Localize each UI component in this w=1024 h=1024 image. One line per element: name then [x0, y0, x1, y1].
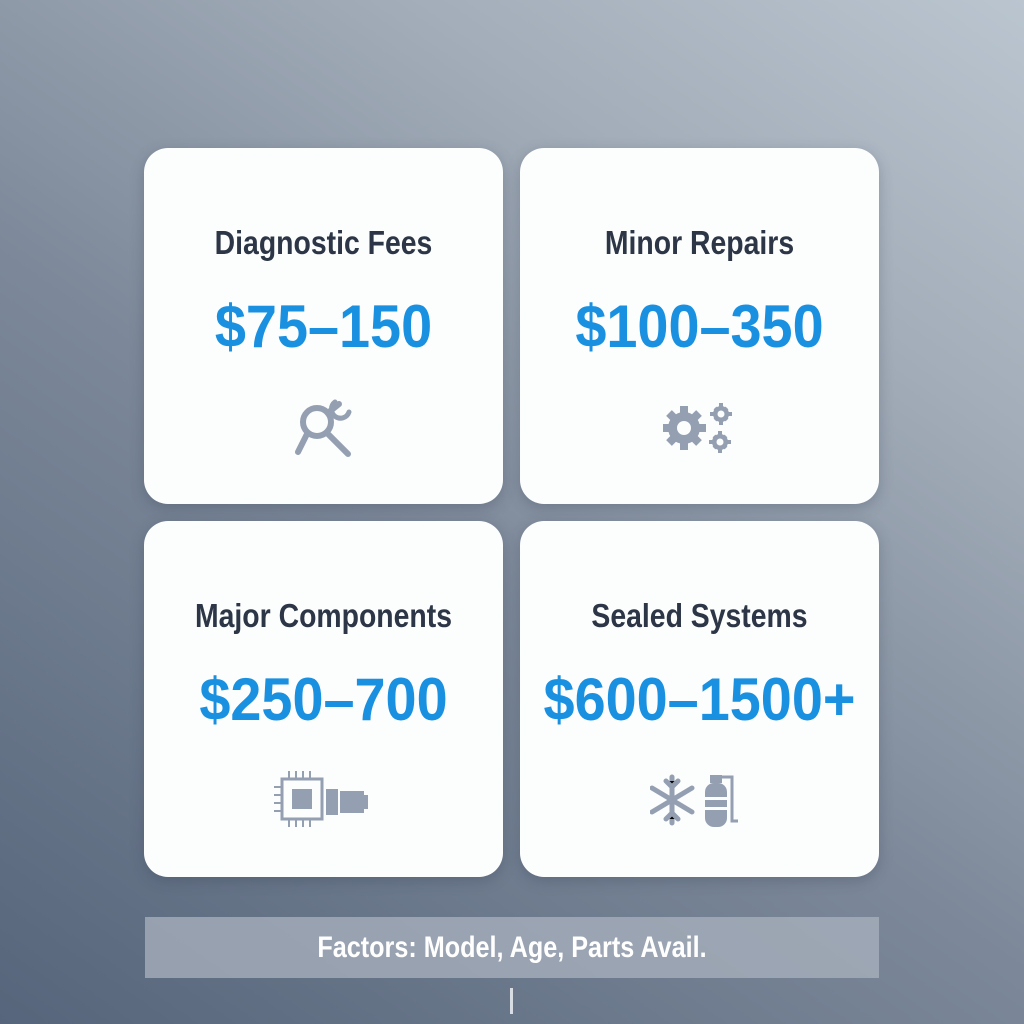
footer bar: factors: [145, 917, 879, 978]
icon: magnifier and wrench: [295, 400, 352, 457]
footer bar: factors: Factors: Model, Age, Parts Avail.: [317, 931, 707, 964]
price: $600–1500+: [544, 666, 855, 733]
heading: Minor Repairs: [605, 224, 794, 261]
icon: gears: [663, 403, 732, 453]
heading: Sealed Systems: [591, 597, 808, 634]
price: $75–150: [215, 293, 432, 360]
icon: chip and motor: [274, 771, 368, 827]
card: major components: [144, 521, 503, 877]
heading: Diagnostic Fees: [215, 224, 432, 261]
card: minor repairs: [520, 148, 879, 504]
price: $100–350: [575, 293, 824, 360]
card: diagnostic fees: [144, 148, 503, 504]
price: $250–700: [199, 666, 448, 733]
card: sealed systems: [520, 521, 879, 877]
icon: snowflake and tank: [650, 774, 738, 827]
heading: Major Components: [195, 597, 452, 634]
